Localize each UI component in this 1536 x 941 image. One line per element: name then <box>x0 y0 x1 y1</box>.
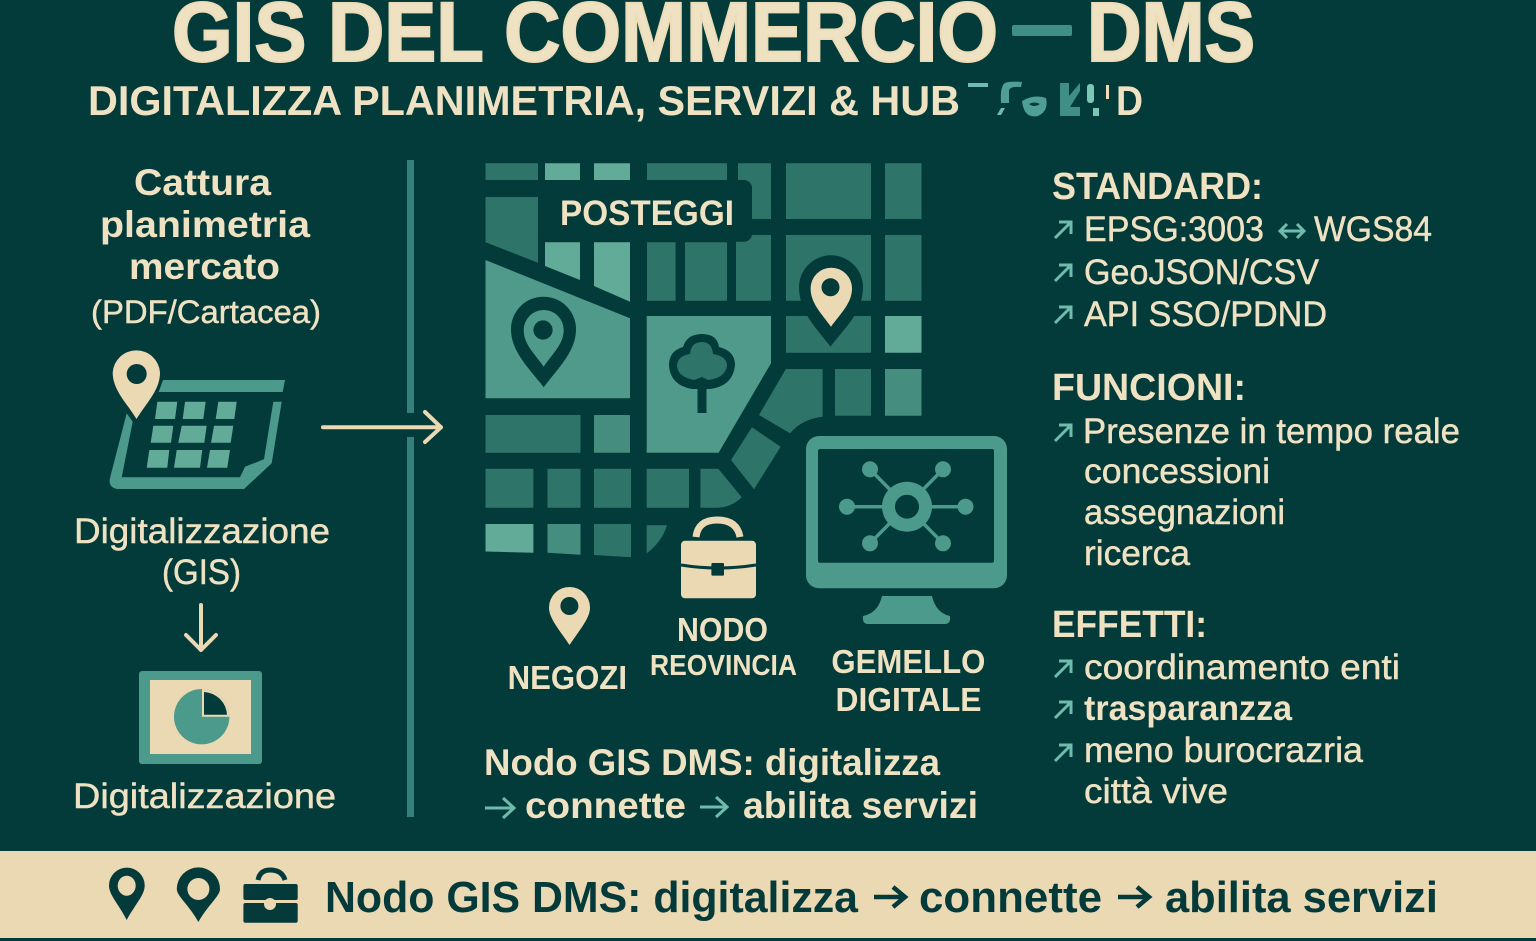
divider <box>407 160 414 817</box>
text: node summary: connette <box>525 785 686 826</box>
panel: effetti: EFFETTI: <box>1052 604 1207 646</box>
text: node summary <box>484 742 978 826</box>
subtitle: DIGITALIZZA PLANIMETRIA, SERVIZI & HUB <box>88 77 960 124</box>
subtitle: D <box>1116 77 1143 124</box>
arrow: to map <box>323 412 441 442</box>
text: footer tagline: connette <box>919 873 1102 922</box>
label: gemello digitale <box>831 643 985 718</box>
map blocks: dark <box>486 163 922 557</box>
label: posteggi <box>540 180 752 242</box>
icon: cream pin <box>799 255 863 347</box>
label: digitalization GIS: (GIS) <box>162 553 241 592</box>
panel: standard: STANDARD: <box>1052 166 1263 208</box>
map blocks: large parcels <box>486 260 771 453</box>
panel: standard: EPSG:3003 <box>1084 210 1264 249</box>
icon: footer pin 1 <box>109 868 145 920</box>
panel: funzioni: concessioni <box>1084 452 1270 491</box>
panel: standard: API SSO/PDND <box>1084 295 1327 334</box>
icon: calendar map with pin <box>110 350 285 489</box>
icon: footer briefcase <box>243 870 298 923</box>
panel: effetti: meno burocrazria <box>1084 731 1364 770</box>
panel: effetti: coordinamento enti <box>1084 648 1400 687</box>
text: node summary: Nodo GIS DMS: digitalizza <box>484 742 940 783</box>
map blocks: light <box>486 163 922 553</box>
icon: briefcase <box>681 520 756 598</box>
text: node summary: abilita servizi <box>743 785 978 826</box>
label: negozi: NEGOZI <box>508 659 627 696</box>
heading: capture: mercato <box>129 246 280 287</box>
panel: funzioni: Presenze in tempo reale <box>1083 412 1460 451</box>
arrow: down <box>186 605 216 650</box>
icon: tree <box>669 334 735 413</box>
label: digitalization GIS: Digitalizzazione <box>74 512 330 551</box>
text: footer tagline: Nodo GIS DMS: digitalizza <box>325 873 859 922</box>
label: digitalization GIS <box>74 512 330 592</box>
map blocks: medium <box>548 369 922 555</box>
icon: shop pin <box>549 587 590 645</box>
label: nodo provincia <box>650 611 797 682</box>
panel: funzioni: ricerca <box>1084 534 1191 573</box>
footer band <box>0 851 1536 938</box>
icon: teal pin <box>511 297 576 387</box>
text: footer tagline: abilita servizi <box>1165 873 1438 922</box>
panel: effetti: città vive <box>1084 772 1228 811</box>
label: nodo provincia: REOVINCIA <box>650 650 797 682</box>
panel: funzioni: assegnazioni <box>1084 493 1285 532</box>
label: digitalization: Digitalizzazione <box>73 777 336 816</box>
panel: standard: GeoJSON/CSV <box>1084 253 1320 292</box>
panel: standard <box>1052 166 1432 334</box>
heading: capture: (PDF/Cartacea) <box>91 294 321 330</box>
icon: monitor with network <box>806 436 1007 624</box>
label: gemello digitale: DIGITALE <box>836 681 982 718</box>
panel: capture flow <box>73 162 336 816</box>
panel: effetti: trasparanzza <box>1084 689 1293 728</box>
icon: footer pin 2 <box>177 867 220 922</box>
panel: funzioni <box>1052 367 1460 573</box>
panel: funzioni: FUNCIONI: <box>1052 367 1246 409</box>
heading: capture: planimetria <box>100 204 310 245</box>
text: footer tagline <box>325 873 1438 922</box>
panel: effetti <box>1052 604 1400 811</box>
map: market plan <box>486 163 922 557</box>
icon: pie chart card <box>139 671 262 764</box>
label: posteggi: POSTEGGI <box>560 194 734 233</box>
heading: capture: Cattura <box>134 162 271 203</box>
heading: capture <box>91 162 321 330</box>
label: gemello digitale: GEMELLO <box>831 643 985 680</box>
label: nodo provincia: NODO <box>677 611 768 648</box>
panel: standard: WGS84 <box>1314 210 1432 249</box>
